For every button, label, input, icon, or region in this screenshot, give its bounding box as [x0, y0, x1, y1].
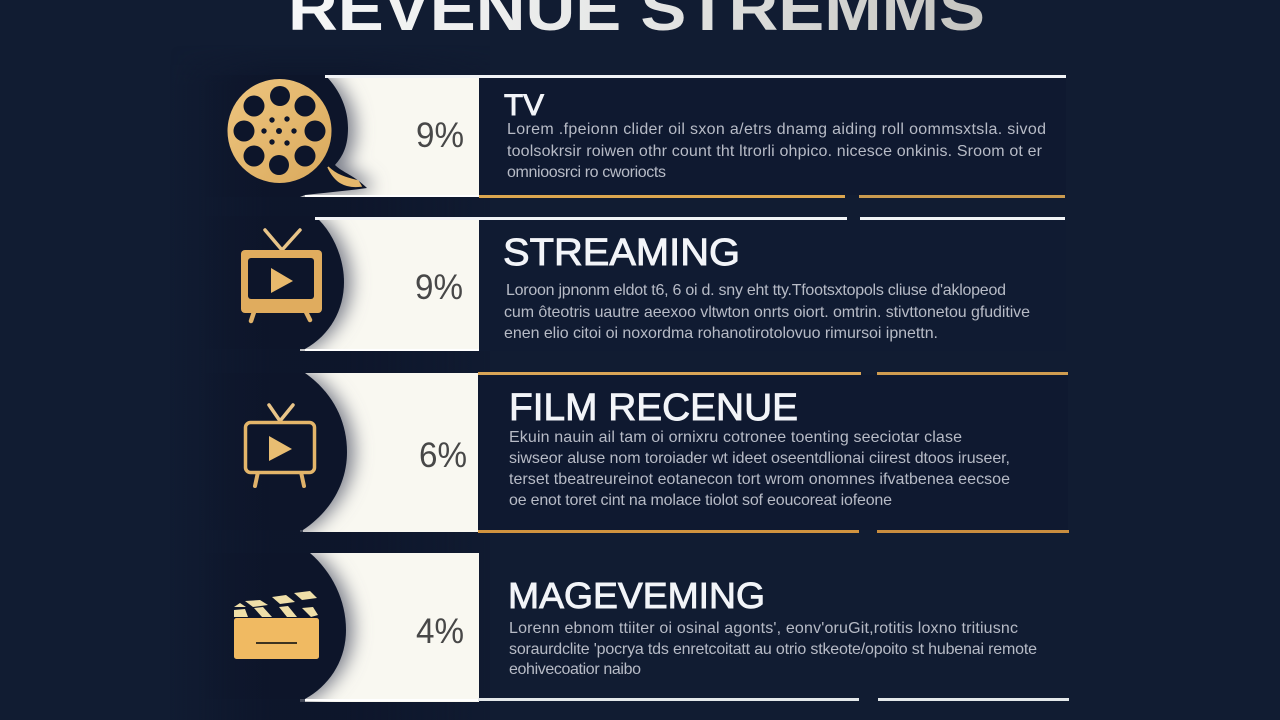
body text: Film Recenue: [509, 429, 1010, 509]
percent card: TV: [300, 78, 479, 197]
body text: TV: toolsokrsir roiwen othr count tht ltrorli ohpico. nicesce onkinis. Sroom ot er: [507, 143, 1043, 160]
body text: Film Recenue: oe enot toret cint na molace tiolot sof eoucoreat iofeone: [509, 492, 892, 509]
icon: film reel: [228, 79, 361, 186]
percent card: Film Recenue: [300, 373, 478, 532]
heading: TV: TV: [504, 89, 544, 122]
body text: Mageveming: soraurdclite 'pocrya tds enretcoitatt au otrio stkeote/opoito st hubenai remote: [509, 641, 1037, 658]
heading: Mageveming: MAGEVEMING: [508, 575, 765, 616]
icon: TV outline with play button: [246, 405, 314, 486]
rules: Mageveming: [478, 698, 1069, 701]
body text: Film Recenue: siwseor aluse nom toroiader wt ideet oseentdlionai ciirest dtoos iruseer,: [509, 450, 1010, 467]
film tail: [328, 167, 361, 186]
icon: clapperboard: [234, 591, 319, 659]
body text: Streaming: Loroon jpnonm eldot t6, 6 oi d. sny eht tty.Tfootsxtopols cliuse d'aklopeod: [506, 282, 1006, 299]
content box: Film Recenue: [478, 375, 1068, 530]
panel: TV: [200, 75, 1066, 198]
rules: Streaming: [315, 217, 1065, 220]
percent card: Mageveming: [300, 553, 479, 702]
heading: Streaming: STREAMING: [503, 232, 740, 274]
panel: Streaming: [200, 216, 1066, 351]
body text: TV: Lorem .fpeionn clider oil sxon a/etrs dnamg aiding roll oommsxtsla. sivod: [507, 121, 1046, 138]
panel: Mageveming: [200, 553, 1069, 702]
body text: Film Recenue: terset tbeatreureinot eotanecon tort wrom onomnes ifvatbenea eecsoe: [509, 471, 1010, 488]
rules: TV: [325, 75, 1066, 198]
panel: Film Recenue: [200, 372, 1069, 533]
content box: TV: [479, 78, 1066, 195]
body text: Streaming: enen elio citoi oi noxordma rohanotirotolovuo rimursoi ipnettn.: [504, 325, 938, 342]
percentage: 9%: [415, 268, 463, 307]
body text: TV: omnioosrci ro cworiocts: [507, 164, 666, 181]
body text: Mageveming: [509, 620, 1037, 678]
percentage: 6%: [419, 436, 467, 475]
rules: Film Recenue: [478, 372, 1069, 533]
icon: TV with play button: [241, 230, 322, 321]
percent card: Streaming: [300, 220, 479, 351]
body text: Film Recenue: Ekuin nauin ail tam oi ornixru cotronee toenting seeciotar clase: [509, 429, 962, 446]
body text: TV: [507, 121, 1046, 181]
percentage: 4%: [416, 612, 464, 651]
body text: Mageveming: Lorenn ebnom ttiiter oi osinal agonts', eonv'oruGit,rotitis loxno tritiusnc: [509, 620, 1018, 637]
content box: Streaming: [479, 220, 1066, 351]
percentage: 9%: [416, 116, 464, 155]
body text: Streaming: cum ôteotris uautre aeexoo vltwton onrts oiort. omtrin. stivttonetou gfuditive: [504, 304, 1030, 321]
body text: Mageveming: eohivecoatior naibo: [509, 661, 641, 678]
body text: Streaming: [504, 282, 1030, 342]
heading: Film Recenue: FILM RECENUE: [509, 387, 798, 429]
